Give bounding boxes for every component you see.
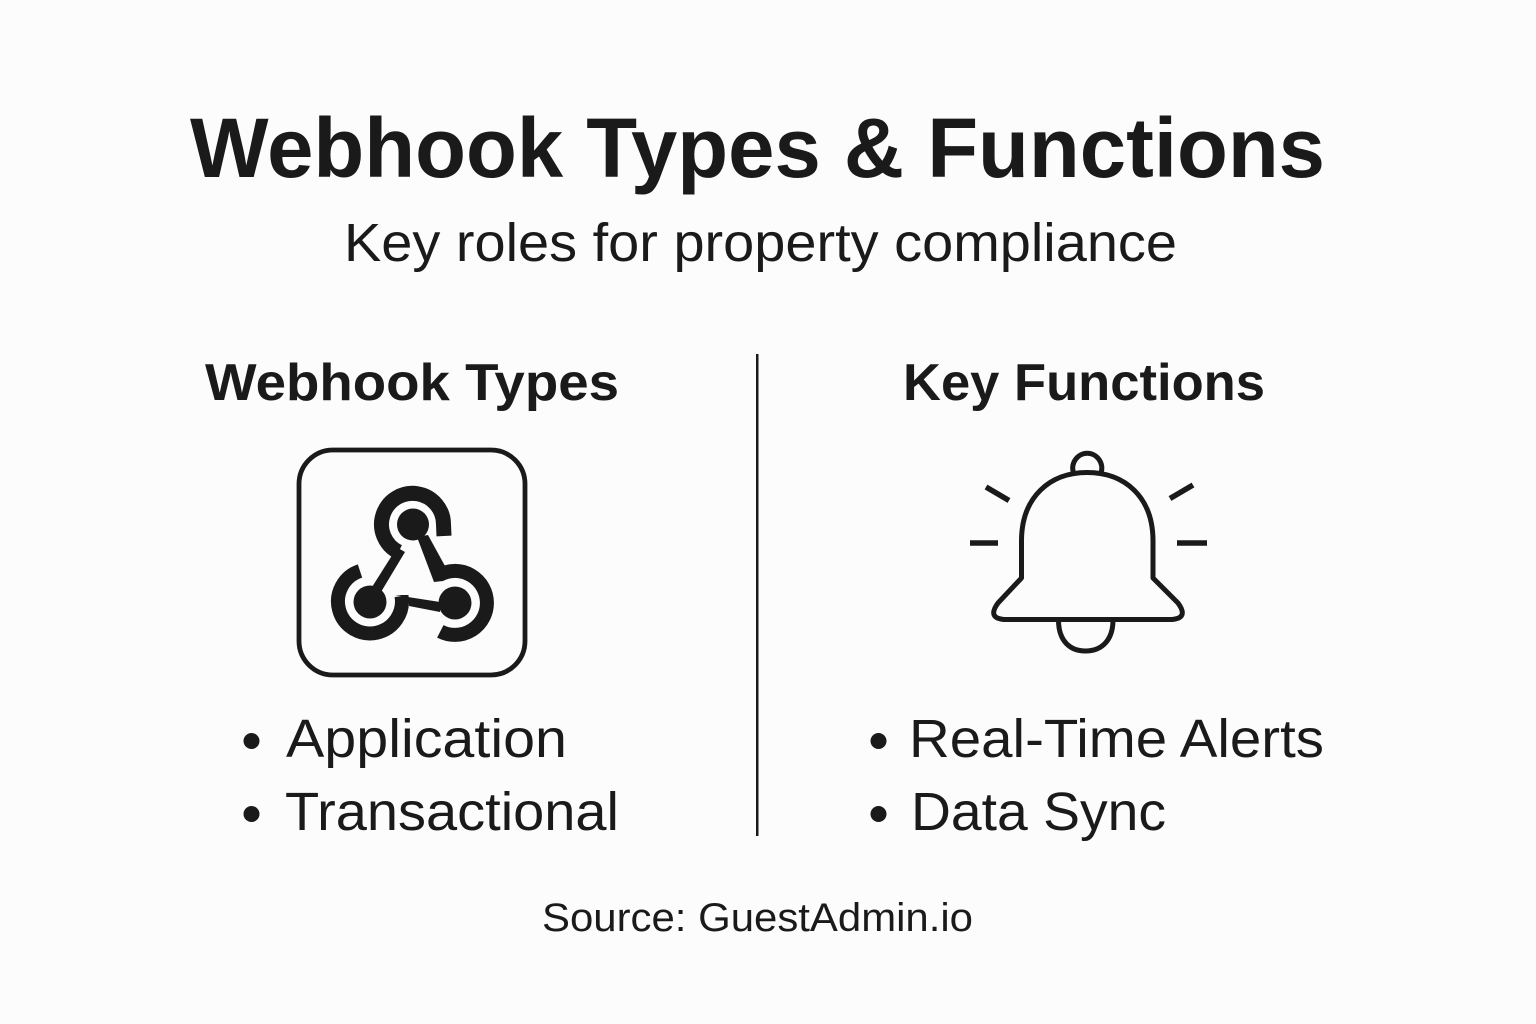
source line: Source: GuestAdmin.io [542, 896, 973, 940]
center divider [756, 354, 758, 836]
bullet list: key functions [870, 709, 1324, 842]
bullet list: webhook types: Application [286, 709, 567, 769]
icon: bell with alert lines [970, 453, 1207, 651]
bullet list: webhook types: Transactional [285, 782, 619, 842]
panel: key functions [870, 354, 1324, 842]
heading: key functions: Key Functions [903, 354, 1265, 412]
panel: webhook types [205, 354, 619, 842]
subtitle: Key roles for property compliance [344, 213, 1177, 273]
bullet list: key functions: Data Sync [911, 782, 1166, 842]
icon: webhook logo [299, 450, 525, 675]
heading: webhook types: Webhook Types [205, 354, 619, 412]
title: Webhook Types & Functions [190, 101, 1325, 195]
bullet list: webhook types [244, 709, 619, 842]
bullet list: key functions: Real-Time Alerts [909, 709, 1324, 769]
